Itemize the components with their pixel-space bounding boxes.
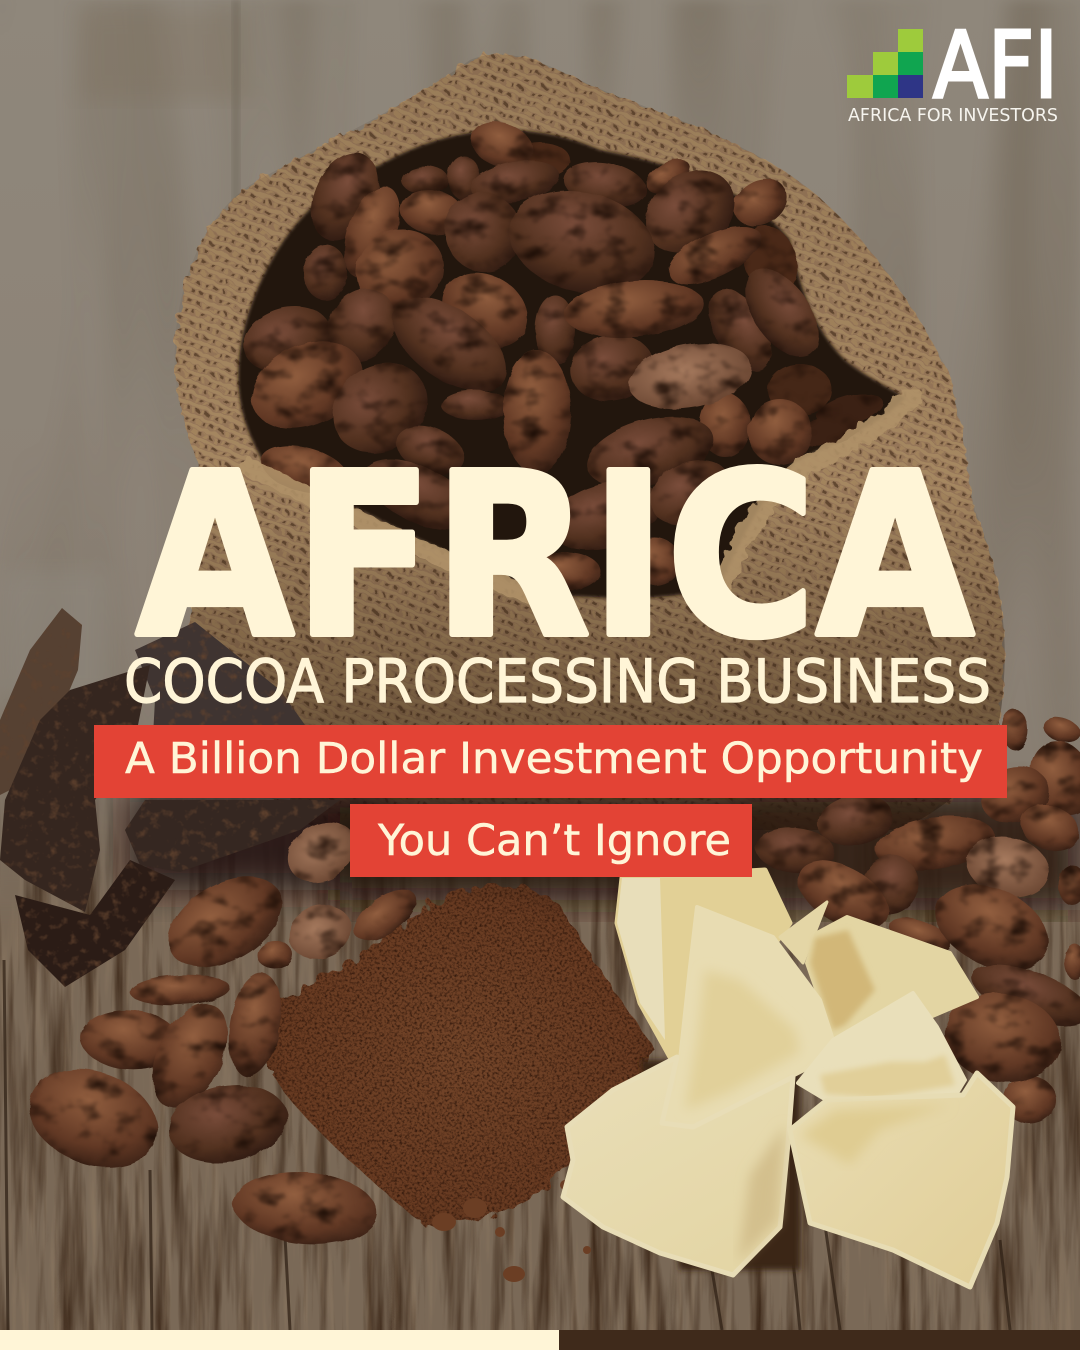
lower left butter chunk <box>563 1057 793 1275</box>
red banner: billion dollar opportunity: A Billion Dollar Investment Opportunity <box>125 734 983 784</box>
powder crumbs <box>432 1180 591 1282</box>
burlap sack <box>175 54 1005 830</box>
lower right butter chunk <box>790 1073 1013 1287</box>
cocoa beans on the table, right <box>753 710 1080 1124</box>
logo staircase squares <box>847 29 923 98</box>
powder heap <box>268 886 655 1225</box>
back butter chunk <box>617 870 790 1057</box>
cocoa powder mound <box>268 886 655 1282</box>
cocoa beans inside sack <box>236 113 886 592</box>
subtitle: cocoa processing business: COCOA PROCESSING BUSINESS <box>124 647 991 717</box>
red banner: you can't ignore <box>350 804 752 877</box>
sack shading <box>175 54 1005 830</box>
cocoa beans on the table, left <box>15 810 425 1250</box>
logo wordmark: AFI <box>933 12 1058 119</box>
dark chocolate shards <box>0 608 340 987</box>
upper right butter chunk <box>807 917 977 1037</box>
shadow behind butter <box>640 1060 800 1270</box>
red banner: billion dollar opportunity <box>94 725 1007 798</box>
thin butter shard <box>780 902 827 963</box>
sack opening shadow <box>238 130 905 598</box>
shadow under sack <box>130 790 1080 910</box>
small right butter chunk <box>798 993 965 1102</box>
middle butter chunk <box>662 907 832 1127</box>
sack body <box>175 54 1005 830</box>
title: AFRICA: AFRICA <box>136 426 974 688</box>
logo: AFI Africa for Investors <box>847 12 1058 126</box>
sack front rim <box>250 396 912 606</box>
red banner: you can't ignore: You Can’t Ignore <box>377 816 731 866</box>
cocoa butter chunks <box>563 870 1013 1287</box>
logo tagline: AFRICA FOR INVESTORS <box>848 106 1058 126</box>
bottom colour bar <box>0 1330 1080 1350</box>
